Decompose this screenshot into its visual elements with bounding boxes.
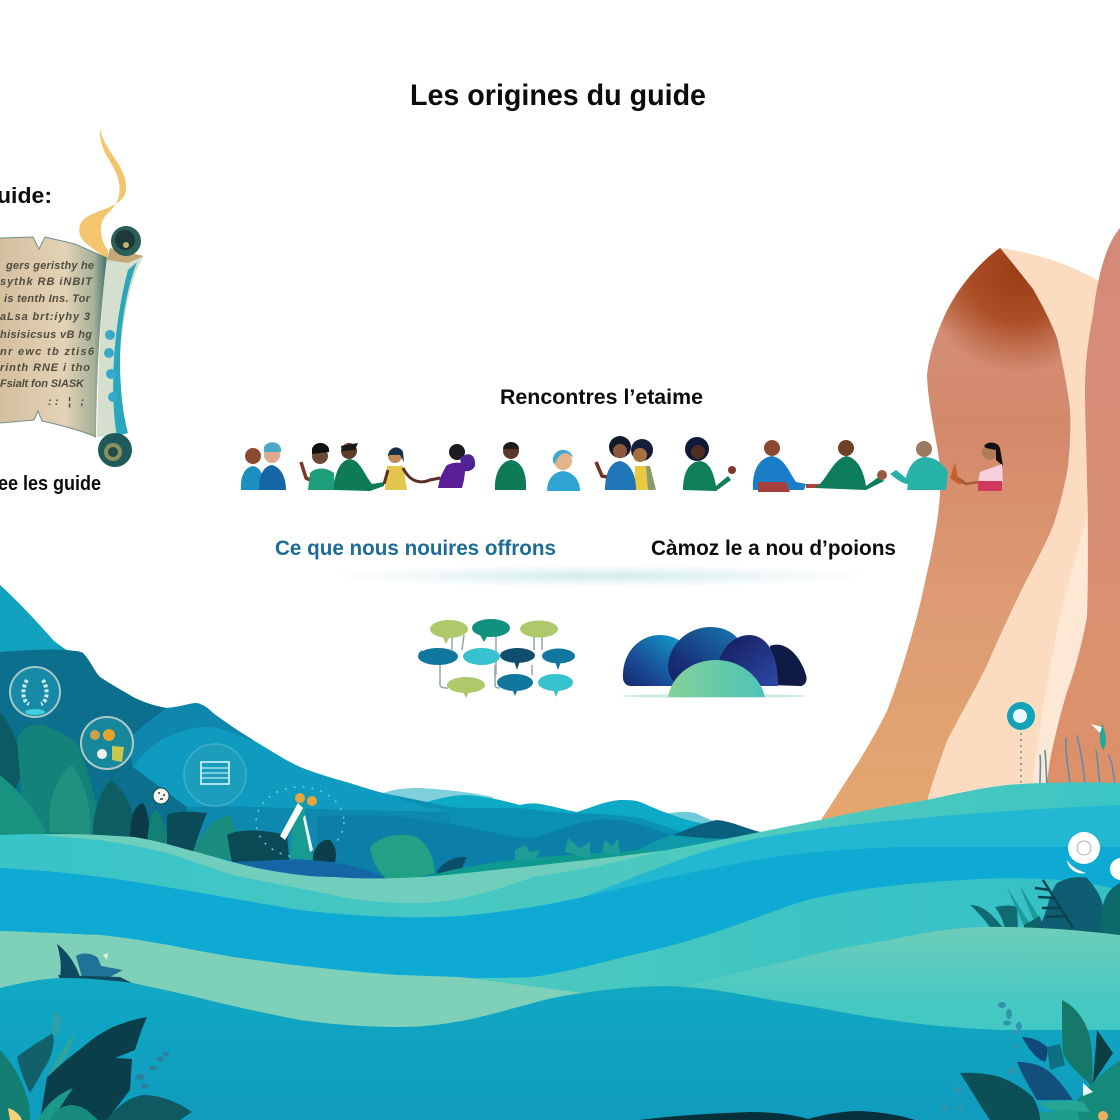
landscape: left mountain [0,585,760,900]
foliage: bottom-left leaves [0,1010,192,1120]
person group: elders shaking hands [753,440,966,492]
text: scroll script: aLsa brt:iyhy 3 [0,311,90,323]
text: scroll script [0,260,95,408]
foliage: small plant on mint band [57,944,132,983]
text: scroll script: :: ¦ ; [48,396,84,408]
diagram: linked turtle-shaped nodes [418,619,575,698]
row of people holding hands [241,436,1003,492]
ground strip [230,860,390,880]
person group: linked team [301,443,475,491]
person: woman in pink [958,442,1003,491]
person group: pair in blue [241,442,286,490]
text: scroll script: is tenth Ins. Tor [4,293,91,305]
icon: glass bubbles [10,667,246,806]
landscape: distant hills [383,788,760,900]
text: scroll script: gers geristhy he [5,260,94,272]
text: scroll script: sythk RB iNBIT [0,276,93,288]
text: scroll script: nr ewc tb ztis6 [0,346,95,358]
heading: scroll caption fragment: ee les guide [0,473,101,495]
icon: open book silhouette [640,1111,915,1120]
icon: map pin with dotted line [1007,702,1035,785]
landscape: deep water foreground [0,978,1120,1120]
icon: parchment scroll [0,226,144,467]
foliage: bottom-right leaves [941,1000,1120,1120]
icon: white discs [1067,832,1120,880]
figure: person with dotted halo [256,787,344,862]
bubble: document [184,744,246,806]
large round leaf [370,835,435,885]
bubble: small badge [153,788,169,804]
person group: pair with raised fist [596,436,656,490]
person: blue hair [547,450,580,491]
text: scroll script: rinth RNE i tho [0,362,90,374]
panel: flowing terracotta ribbon [822,228,1120,830]
heading: what we offer: Ce que nous nouires offrons [275,537,556,560]
title: Les origines du guide [410,79,706,112]
text: scroll script: hisisicsus vB hg [0,329,92,341]
landscape: rolling water bands [0,782,1120,1120]
decorative shadow under headings [330,565,870,587]
heading: second offer: Càmoz le a nou d’poions [651,537,896,560]
icon: small leaf marker [1091,723,1106,750]
foliage: grass blades [1040,735,1115,786]
heading: meetings: Rencontres l’etaime [500,386,703,409]
landscape: mint hill and deep water [0,927,1120,1120]
bubble: fruit and objects [81,717,133,769]
foliage: right hillside leaves [970,877,1120,940]
person: green top, big hair [683,437,736,491]
icon: overlapping domes [622,627,807,698]
person: green sweater [495,442,526,490]
foliage: left leaves [0,712,660,885]
text: scroll script: Fsialt fon SIASK [0,378,85,390]
icon: flame wisp [79,127,126,260]
bubble: anatomy [10,667,60,717]
